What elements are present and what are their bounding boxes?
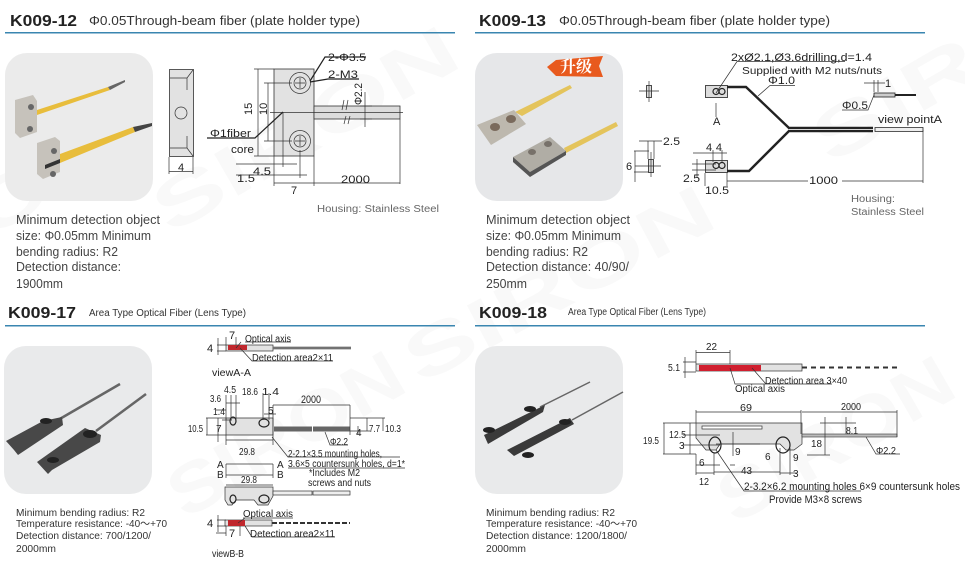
technical drawing: K009-17 top view: 7 — [216, 424, 222, 435]
technical drawing: K009-13 fiber assembly: Supplied with M2 nuts/nuts — [742, 66, 882, 77]
technical drawing: K009-18 top view: 19.5 — [643, 436, 659, 447]
technical drawing: K009-17 top view — [188, 385, 405, 489]
technical drawing: K009-17 top view: 2-2.1×3.5 mounting holes, — [288, 449, 382, 460]
technical drawing: K009-18 top view: 2000 — [841, 402, 861, 413]
spec text: K009-12: size: Φ0.05mm Minimum — [16, 229, 151, 243]
panel: K009-12 — [5, 13, 455, 291]
technical drawing: K009-18 side view: Detection area 3×40 — [765, 376, 847, 387]
product photo: K009-13 — [475, 53, 623, 201]
heading: K009-18 — [475, 305, 925, 326]
technical drawing: K009-18 top view: 6 — [765, 452, 771, 463]
heading: K009-18: K009-18 — [479, 305, 547, 322]
technical drawing: K009-17 top view: 1.4 — [262, 387, 280, 398]
technical drawing: K009-18 top view: 9 — [735, 447, 741, 458]
technical drawing: K009-18 top view: 12 — [699, 477, 709, 488]
technical drawing: K009-17 view A-A — [207, 330, 351, 379]
technical drawing: K009-17 top view: 1.4 — [213, 407, 225, 418]
technical drawing: K009-18 top view: 12.5 — [669, 430, 686, 441]
technical drawing: K009-18 top view: Φ2.2 — [876, 446, 896, 457]
technical drawing: K009-17 bottom view: 29.8 — [241, 475, 257, 486]
technical drawing: K009-13 fiber assembly: Φ1.0 — [768, 75, 795, 87]
heading: K009-13 — [475, 13, 925, 34]
technical drawing: K009-18 top view: 3 — [793, 469, 799, 480]
spec text: K009-18: Temperature resistance: -40～+70 — [486, 518, 637, 530]
technical drawing: K009-18 top view: 6 — [699, 458, 705, 469]
watermark: SIRON — [390, 170, 727, 398]
technical drawing: K009-13 fiber assembly — [683, 52, 943, 197]
technical drawing: K009-17 bottom view: B — [277, 470, 284, 481]
technical drawing: K009-13 fiber assembly: 1 — [885, 78, 891, 90]
technical drawing: K009-13 end views — [626, 81, 680, 182]
technical drawing: K009-13 fiber assembly: 1000 — [809, 175, 838, 187]
technical drawing: K009-12 plate holder: 7 — [291, 185, 297, 197]
spec text: K009-12: bending radius: R2 — [16, 245, 118, 259]
technical drawing: K009-13 fiber assembly: 2.5 — [683, 173, 700, 185]
technical drawing: K009-17 top view: 10.3 — [385, 424, 401, 435]
spec text: K009-13: size: Φ0.05mm Minimum — [486, 229, 621, 243]
technical drawing: K009-17 view B-B: 7 — [229, 528, 235, 540]
technical drawing: K009-17 top view: 3.6×5 countersunk holes, d=1* — [288, 459, 405, 470]
technical drawing: K009-17 top view: 18.6 — [242, 387, 258, 398]
technical drawing: K009-17 bottom view: A — [217, 460, 224, 471]
heading: K009-18: Area Type Optical Fiber (Lens Type) — [568, 307, 706, 318]
panel: K009-18 — [475, 305, 960, 555]
spec text: K009-13: Detection distance: 40/90/ — [486, 260, 630, 274]
spec text: K009-17: Minimum bending radius: R2 — [16, 507, 145, 519]
heading: K009-17 — [5, 305, 455, 326]
note: housing material: Housing: Stainless Steel — [317, 204, 439, 215]
technical drawing: K009-18 side view: Optical axis — [735, 384, 785, 395]
product photo: K009-17 — [4, 346, 152, 494]
spec text: K009-13: Minimum detection object — [486, 213, 631, 227]
note: housing material: Stainless Steel — [851, 207, 924, 218]
technical drawing: K009-17 top view: 5 — [268, 406, 274, 417]
technical drawing: K009-12 plate holder: 4.5 — [253, 166, 271, 178]
spec text: K009-12: Detection distance: — [16, 260, 121, 274]
technical drawing: K009-13 fiber assembly: view pointA — [878, 114, 943, 126]
heading: K009-12 — [5, 13, 455, 34]
watermark: SIRON — [138, 10, 472, 248]
technical drawing: K009-12 side view — [169, 70, 194, 174]
technical drawing: K009-17 top view: 29.8 — [239, 447, 255, 458]
technical drawing: K009-17 view A-A: 4 — [207, 343, 213, 355]
heading: K009-13: Φ0.05Through-beam fiber (plate holder type) — [559, 13, 830, 28]
spec text: K009-17: 2000mm — [16, 543, 56, 555]
technical drawing: K009-17 top view: *Includes M2 — [309, 468, 360, 479]
spec text: K009-12: Minimum detection object — [16, 213, 161, 227]
spec text: K009-17: Temperature resistance: -40～+70 — [16, 518, 167, 530]
technical drawing: K009-17 bottom view: B — [217, 470, 224, 481]
technical drawing: K009-12 plate holder: 2-Φ3.5 — [328, 52, 366, 64]
technical drawing: K009-17 view A-A: Detection area2×11 — [252, 353, 333, 364]
panel: K009-13 — [475, 13, 943, 291]
technical drawing: K009-13 fiber assembly: A — [713, 116, 721, 128]
technical drawing: K009-13 fiber assembly: 44 — [706, 142, 722, 154]
technical drawing: K009-12 plate holder: 1.5 — [237, 173, 255, 185]
technical drawing: K009-17 top view: 4.5 — [224, 385, 236, 396]
technical drawing: K009-17 view B-B: Optical axis — [243, 509, 293, 520]
heading: K009-17: Area Type Optical Fiber (Lens Type) — [89, 308, 246, 319]
product photo: K009-12 — [5, 53, 153, 201]
technical drawing: K009-17 top view: 7.7 — [369, 424, 380, 435]
technical drawing: K009-12 plate holder: 2000 — [341, 174, 370, 186]
technical drawing: K009-12 plate holder: core — [231, 144, 254, 156]
note: housing material: Housing: — [851, 194, 895, 205]
technical drawing: K009-12 side view: 4 — [178, 162, 184, 174]
technical drawing: K009-12 plate holder: Φ2.2 — [353, 83, 365, 105]
technical drawing: K009-18 side view: 5.1 — [668, 363, 680, 374]
technical drawing: K009-17 top view: Φ2.2 — [330, 437, 348, 448]
spec text: K009-18: 2000mm — [486, 543, 526, 555]
technical drawing: K009-12 plate holder — [207, 52, 403, 197]
badge: upgrade: 升级 — [560, 58, 592, 76]
watermark: SIRON — [704, 340, 965, 538]
technical drawing: K009-13 fiber assembly: Φ0.5 — [842, 100, 868, 112]
technical drawing: K009-17 view A-A: viewA-A — [212, 368, 251, 379]
spec text: K009-18: Minimum bending radius: R2 — [486, 507, 615, 519]
technical drawing: K009-17 top view: screws and nuts — [308, 478, 371, 489]
heading: K009-12: Φ0.05Through-beam fiber (plate holder type) — [89, 13, 360, 28]
technical drawing: K009-17 view B-B: 4 — [207, 518, 213, 530]
product photo: K009-18 — [475, 346, 623, 494]
spec text: K009-13: bending radius: R2 — [486, 245, 588, 259]
technical drawing: K009-18 side view: 22 — [706, 342, 717, 353]
panel: K009-17 — [4, 305, 455, 560]
badge: upgrade — [547, 56, 603, 77]
technical drawing: K009-13 fiber assembly: 10.5 — [705, 185, 729, 197]
technical drawing: K009-12 plate holder: 2-M3 — [328, 69, 358, 81]
technical drawing: K009-18 top view: 8.1 — [846, 426, 858, 437]
technical drawing: K009-13 fiber assembly: 2xØ2.1,Ø3.6drilling,d=1.4 — [731, 52, 872, 64]
technical drawing: K009-17 top view: 2000 — [301, 394, 321, 406]
technical drawing: K009-13 end views: 2.5 — [663, 136, 680, 148]
technical drawing: K009-17 top view: 3.6 — [210, 394, 221, 405]
technical drawing: K009-18 top view: 69 — [740, 403, 752, 414]
heading: K009-17: K009-17 — [8, 305, 76, 322]
spec text: K009-13: 250mm — [486, 277, 527, 291]
technical drawing: K009-18 top view: 9 — [793, 453, 799, 464]
technical drawing: K009-17 bottom view — [217, 460, 350, 505]
technical drawing: K009-13 end views: 6 — [626, 161, 632, 173]
heading: K009-13: K009-13 — [479, 13, 546, 30]
spec text: K009-18: Detection distance: 1200/1800/ — [486, 530, 627, 542]
technical drawing: K009-12 plate holder: Φ1fiber — [210, 128, 251, 140]
technical drawing: K009-12 plate holder: 10 — [258, 103, 270, 115]
technical drawing: K009-17 view A-A: Optical axis — [245, 334, 291, 345]
technical drawing: K009-18 top view: 18 — [811, 439, 822, 450]
technical drawing: K009-18 side view — [668, 342, 900, 395]
technical drawing: K009-17 view B-B: viewB-B — [212, 549, 244, 560]
heading: K009-12: K009-12 — [10, 13, 77, 30]
spec text: K009-12: 1900mm — [16, 277, 63, 291]
technical drawing: K009-18 top view — [643, 402, 960, 506]
technical drawing: K009-18 top view: 43 — [741, 466, 752, 477]
technical drawing: K009-12 plate holder: 15 — [243, 103, 255, 115]
technical drawing: K009-18 top view: Provide M3×8 screws — [769, 494, 862, 506]
technical drawing: K009-17 top view: 10.5 — [188, 424, 203, 435]
technical drawing: K009-17 view B-B: Detection area2×11 — [250, 529, 335, 540]
technical drawing: K009-17 bottom view: A — [277, 460, 284, 471]
technical drawing: K009-17 view A-A: 7 — [229, 330, 235, 342]
watermark: SIRON — [154, 335, 418, 533]
technical drawing: K009-18 top view: 3 — [679, 441, 685, 452]
technical drawing: K009-17 top view: 4 — [356, 428, 362, 439]
spec text: K009-17: Detection distance: 700/1200/ — [16, 530, 151, 542]
technical drawing: K009-17 view B-B — [207, 509, 350, 560]
